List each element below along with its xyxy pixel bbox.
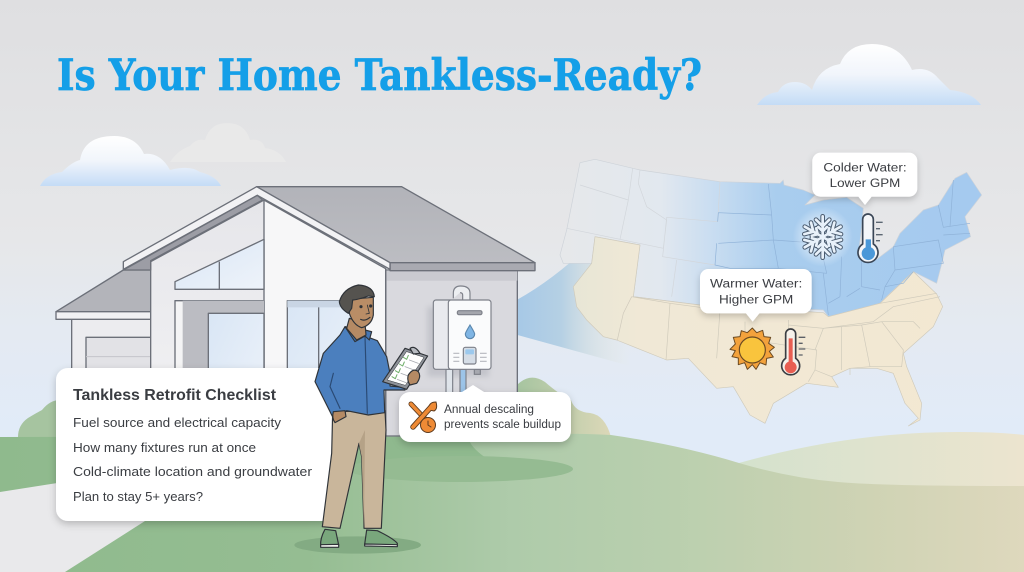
callout: warmer water — [700, 269, 812, 322]
back hill — [739, 432, 1024, 500]
darker lawn by wall — [346, 437, 486, 472]
gable walls — [151, 200, 386, 436]
ground shadow — [347, 456, 573, 482]
icon: hot thermometer — [782, 329, 805, 375]
panel: tankless retrofit checklist — [56, 368, 336, 521]
state lines warm — [617, 293, 940, 382]
bush right — [517, 378, 611, 437]
checklist items: Fuel source and electrical capacity — [73, 415, 282, 430]
checklist items: How many fixtures run at once — [73, 440, 256, 455]
checklist items: Plan to stay 5+ years? — [73, 489, 203, 504]
callout: annual descaling: prevents scale buildup — [444, 419, 561, 431]
main roof — [257, 187, 535, 263]
garage roof — [56, 270, 152, 312]
checklist heading: Tankless Retrofit Checklist — [73, 387, 276, 404]
callout text: Annual descaling — [444, 404, 534, 416]
map of the United States — [560, 153, 982, 426]
hand — [408, 370, 420, 385]
icon: wrench and clock — [411, 402, 437, 432]
glow behind snowflake — [793, 207, 853, 267]
icon: snowflake — [801, 216, 844, 258]
callout: warmer water: Warmer Water: — [710, 277, 802, 291]
state lines cool west — [567, 168, 720, 297]
icon: cold thermometer — [858, 214, 883, 262]
northern cold zone — [560, 159, 982, 317]
water heater — [427, 286, 491, 394]
checklist items: Cold-climate location and groundwater — [73, 464, 313, 479]
state lines cool east — [715, 180, 970, 315]
cloud: left — [40, 136, 221, 186]
icon: sun — [730, 328, 774, 369]
person with clipboard — [294, 285, 428, 554]
entry — [175, 301, 264, 436]
callout: warmer water: Higher GPM — [719, 292, 793, 306]
cloud: top right — [757, 44, 981, 105]
gable trim — [123, 187, 390, 269]
right wall — [386, 270, 517, 436]
light beam from heater to map — [492, 235, 630, 366]
trousers — [322, 411, 386, 528]
sliding door — [287, 301, 364, 436]
southern warm zone — [573, 237, 943, 426]
bush left — [18, 400, 70, 437]
neck and head — [347, 318, 366, 340]
grey path — [0, 470, 145, 572]
title: Is Your Home Tankless-Ready? — [57, 51, 702, 101]
gable window — [175, 239, 264, 289]
callout: colder water — [812, 153, 917, 205]
shoes — [321, 529, 339, 546]
hills and path — [0, 378, 1024, 572]
house — [56, 187, 535, 436]
callout: colder water: Lower GPM — [830, 176, 900, 190]
clipboard — [383, 347, 428, 389]
water drop — [465, 325, 475, 339]
main hill — [0, 434, 1024, 572]
foot shadow — [294, 536, 421, 554]
callout: colder water: Colder Water: — [823, 161, 907, 175]
shirt — [315, 327, 407, 422]
garage wall — [72, 319, 152, 436]
checklist items — [73, 415, 313, 504]
callout: annual descaling — [399, 385, 571, 442]
cloud: faint behind — [170, 123, 286, 162]
